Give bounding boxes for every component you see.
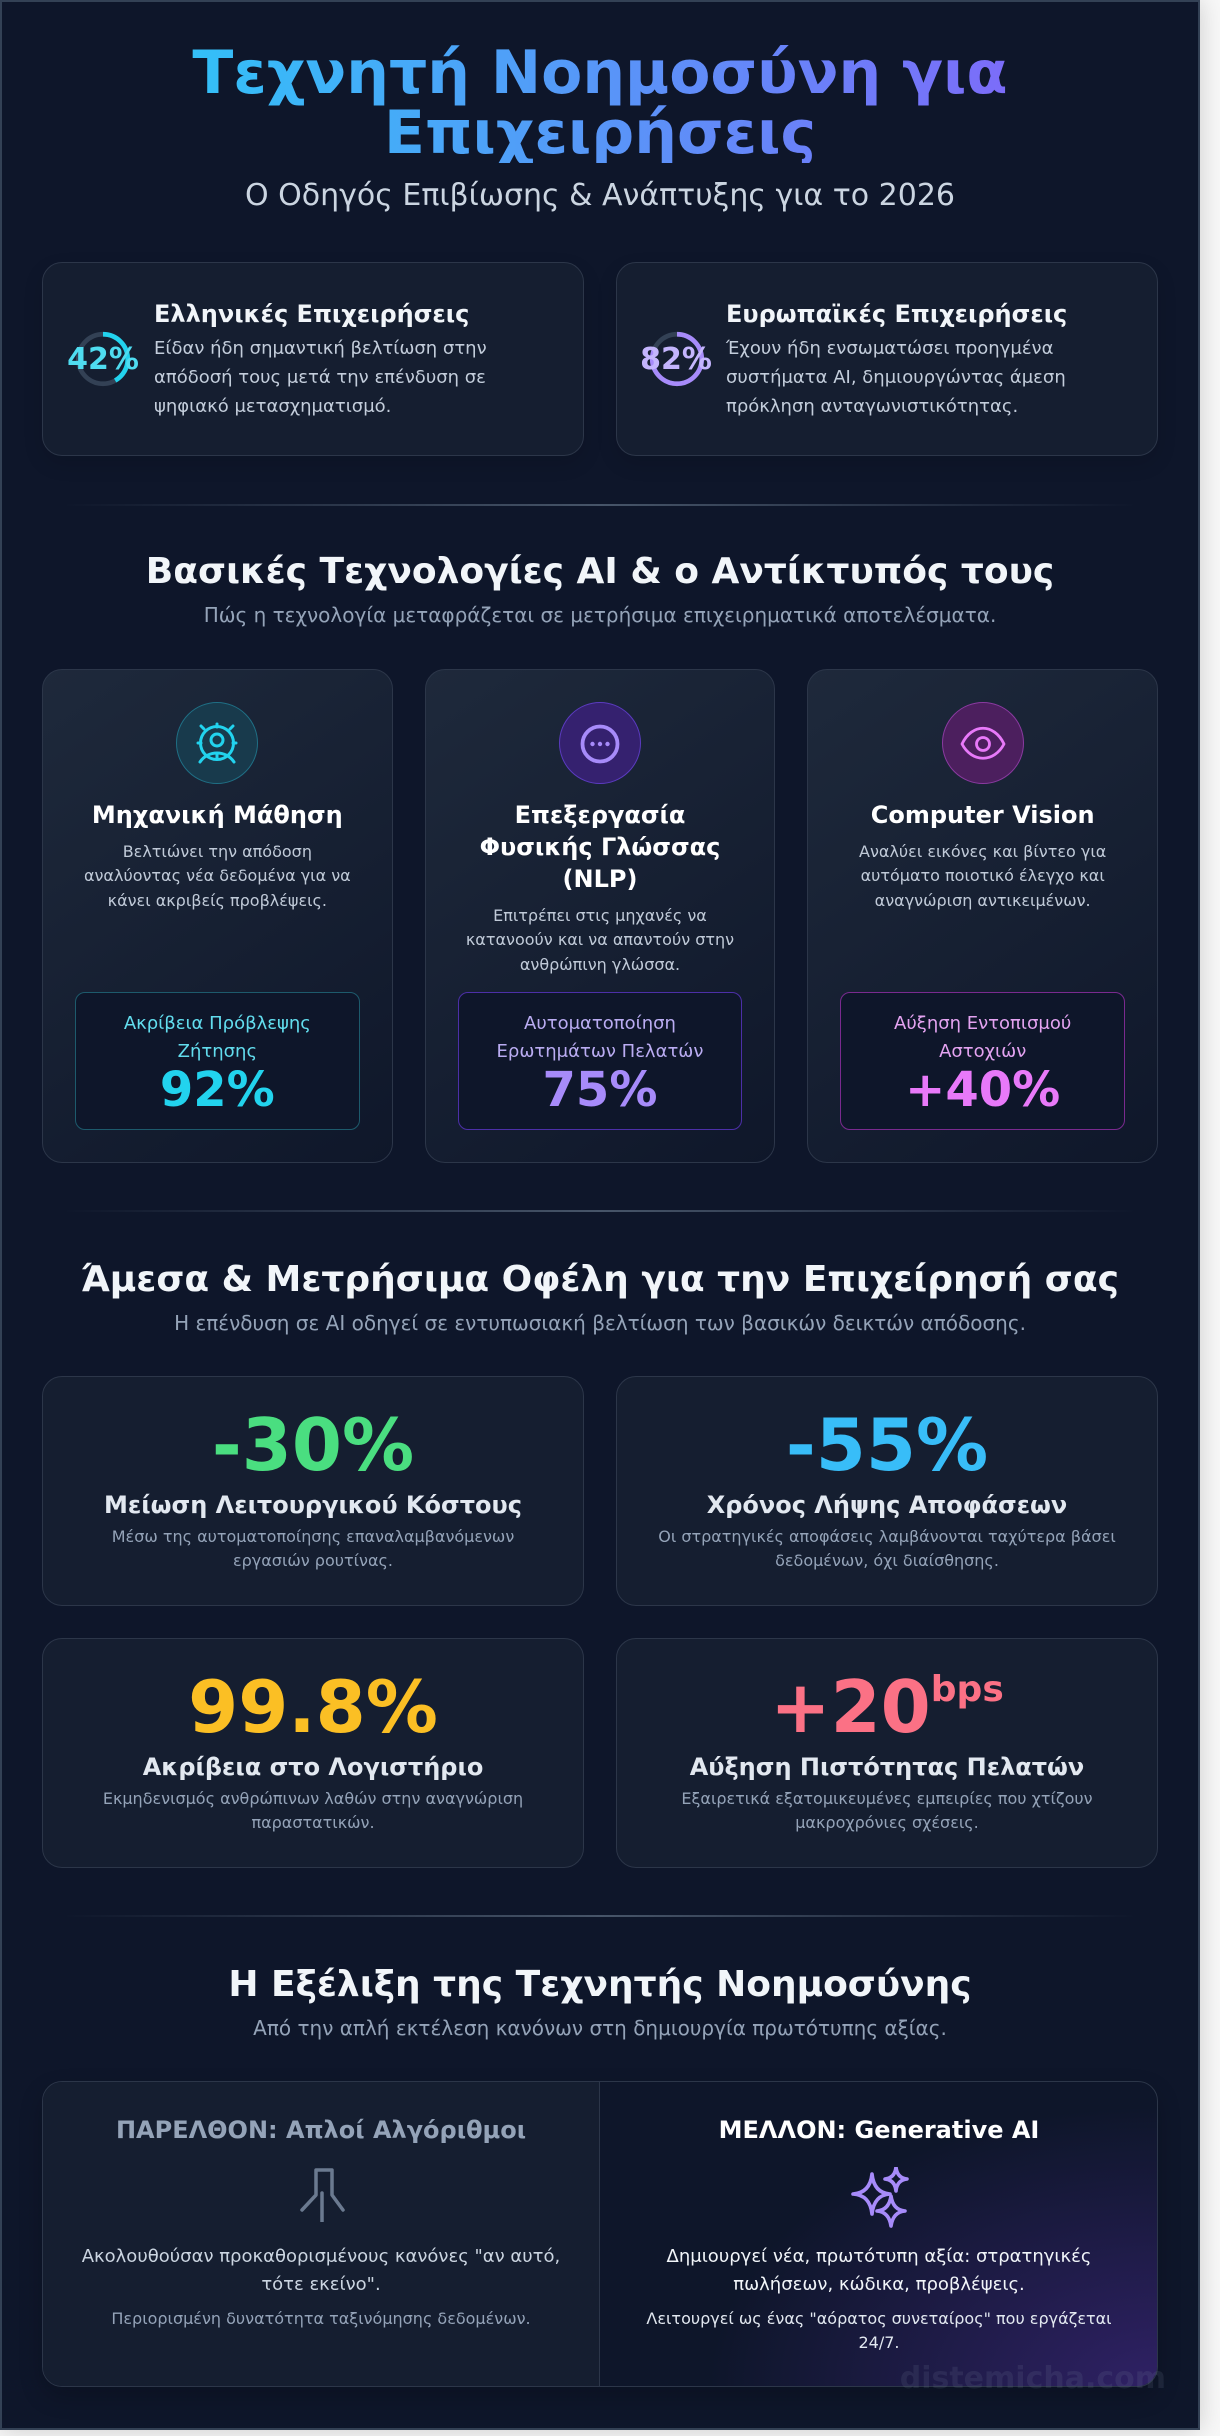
text: European businesses — [726, 300, 1067, 417]
stat description: μακροχρόνιες σχέσεις. — [795, 1813, 979, 1832]
metric label — [497, 1013, 703, 1062]
title: Τεχνητή Νοημοσύνη για — [192, 38, 1008, 108]
metric label — [124, 1013, 311, 1062]
stat description: Εκμηδενισμός ανθρώπινων λαθών στην αναγνώριση — [103, 1789, 523, 1808]
panel: European businesses — [616, 262, 1158, 456]
subtitle: Ο Οδηγός Επιβίωσης & Ανάπτυξης για το 2026 — [245, 178, 955, 213]
stat card: decision time — [616, 1376, 1158, 1606]
stat description — [112, 1527, 514, 1570]
note: future: 24/7. — [858, 2333, 900, 2352]
heading: past: ΠΑΡΕΛΘΟΝ: Απλοί Αλγόριθμοι — [116, 2116, 526, 2144]
metric label — [894, 1013, 1071, 1062]
description — [466, 906, 734, 974]
description: ανθρώπινη γλώσσα. — [520, 955, 680, 974]
text: Greek businesses — [154, 300, 487, 417]
description: κατανοούν και να απαντούν στην — [466, 930, 734, 949]
stat card: cost reduction — [42, 1376, 584, 1606]
metric label: Ερωτημάτων Πελατών — [497, 1041, 703, 1062]
panel: past vs future — [42, 2081, 1158, 2387]
subheading: core technologies: Πώς η τεχνολογία μεταφράζεται σε μετρήσιμα επιχειρηματικά αποτελέσματα. — [204, 603, 996, 627]
text: Greek businesses: Είδαν ήδη σημαντική βελτίωση στην — [154, 338, 487, 359]
text: European businesses: Έχουν ήδη ενσωματώσει προηγμένα — [726, 338, 1053, 359]
text: future: Δημιουργεί νέα, πρωτότυπη αξία: στρατηγικές — [667, 2246, 1091, 2267]
text: past: Ακολουθούσαν προκαθορισμένους κανόνες "αν αυτό, — [82, 2246, 560, 2267]
metric label: Ζήτησης — [178, 1041, 257, 1062]
description: Βελτιώνει την απόδοση — [123, 842, 312, 861]
description: αναλύοντας νέα δεδομένα για να — [84, 866, 351, 885]
metric value: +40% — [905, 1062, 1060, 1118]
panel: NLP — [425, 669, 775, 1163]
text: Greek businesses: ψηφιακό μετασχηματισμό. — [154, 396, 391, 417]
description: αυτόματο ποιοτικό έλεγχο και — [861, 866, 1105, 885]
heading — [480, 801, 720, 893]
description: Επιτρέπει στις μηχανές να — [493, 906, 707, 925]
stat description: Μέσω της αυτοματοποίησης επαναλαμβανόμενων — [112, 1527, 514, 1546]
stat: 82%: 82% — [640, 342, 712, 377]
metric label: Αύξηση Εντοπισμού — [894, 1013, 1071, 1034]
heading: benefits: Άμεσα & Μετρήσιμα Οφέλη για την Επιχείρησή σας — [81, 1259, 1119, 1300]
watermark: distemicha.com — [900, 2361, 1166, 2396]
description: Αναλύει εικόνες και βίντεο για — [859, 842, 1106, 861]
stat card: customer loyalty — [616, 1638, 1158, 1868]
icon: 82% progress ring — [650, 332, 704, 386]
metric label: Ακρίβεια Πρόβλεψης — [124, 1013, 311, 1034]
description — [859, 842, 1106, 910]
heading: core technologies: Βασικές Τεχνολογίες AI & ο Αντίκτυπός τους — [146, 551, 1054, 592]
subheading: evolution: Από την απλή εκτέλεση κανόνων στη δημιουργία πρωτότυπης αξίας. — [253, 2016, 947, 2040]
text: European businesses: συστήματα AI, δημιουργώντας άμεση — [726, 367, 1066, 388]
description — [84, 842, 351, 910]
stat description — [658, 1527, 1116, 1570]
icon: chat bubble — [559, 702, 641, 784]
stat title: Μείωση Λειτουργικού Κόστους — [104, 1491, 522, 1519]
stat description — [681, 1789, 1093, 1832]
stat value: -30% — [212, 1403, 414, 1487]
panel: machine learning — [42, 669, 393, 1163]
stat description: εργασιών ρουτίνας. — [233, 1551, 393, 1570]
icon: sparkles — [851, 2167, 909, 2228]
panel: past — [43, 2082, 600, 2386]
text: past — [82, 2246, 560, 2295]
panel: Greek businesses — [42, 262, 584, 456]
heading: future: ΜΕΛΛΟΝ: Generative AI — [719, 2116, 1039, 2144]
stat description: Εξαιρετικά εξατομικευμένες εμπειρίες που χτίζουν — [681, 1789, 1093, 1808]
description: κάνει ακριβείς προβλέψεις. — [108, 891, 327, 910]
stat value: -55% — [786, 1403, 988, 1487]
heading: Φυσικής Γλώσσας — [480, 833, 720, 861]
text: Greek businesses: απόδοσή τους μετά την επένδυση σε — [154, 367, 486, 388]
icon: eye — [942, 702, 1024, 784]
text: European businesses: Ευρωπαϊκές Επιχειρήσεις — [726, 300, 1067, 328]
subheading: benefits: Η επένδυση σε AI οδηγεί σε εντυπωσιακή βελτίωση των βασικών δεικτών απόδοσης. — [174, 1311, 1026, 1335]
heading: evolution: Η Εξέλιξη της Τεχνητής Νοημοσύνης — [228, 1964, 972, 2005]
icon: 42% progress ring — [76, 332, 130, 386]
icon: machine learning — [176, 702, 258, 784]
metric value: 92% — [160, 1062, 275, 1118]
stat title: Ακρίβεια στο Λογιστήριο — [143, 1753, 483, 1781]
stat value: +20bps — [770, 1665, 1004, 1749]
heading: Μηχανική Μάθηση — [92, 801, 343, 829]
stat description — [103, 1789, 523, 1832]
stat value: 99.8% — [188, 1665, 438, 1749]
description: αναγνώριση αντικειμένων. — [875, 891, 1091, 910]
title — [190, 43, 1010, 163]
heading: Επεξεργασία — [515, 801, 685, 829]
icon: simple algorithm — [300, 2168, 345, 2222]
heading: (NLP) — [563, 865, 637, 893]
stat title: Χρόνος Λήψης Αποφάσεων — [707, 1491, 1067, 1519]
text: European businesses: πρόκληση ανταγωνιστικότητας. — [726, 396, 1018, 417]
note: future — [646, 2309, 1112, 2352]
metric value: 75% — [543, 1062, 657, 1118]
stat description: δεδομένων, όχι διαίσθησης. — [775, 1551, 999, 1570]
metric label: Αστοχιών — [939, 1041, 1026, 1062]
text: future: πωλήσεων, κώδικα, προβλέψεις. — [733, 2274, 1025, 2295]
note: past: Περιορισμένη δυνατότητα ταξινόμησης δεδομένων. — [111, 2309, 531, 2328]
metric label: Αυτοματοποίηση — [524, 1013, 676, 1034]
stat card: accounting accuracy — [42, 1638, 584, 1868]
panel: future — [600, 2082, 1158, 2386]
stat description: Οι στρατηγικές αποφάσεις λαμβάνονται ταχύτερα βάσει — [658, 1527, 1116, 1546]
heading: Computer Vision — [871, 801, 1095, 829]
text: Greek businesses: Ελληνικές Επιχειρήσεις — [154, 300, 469, 328]
note: future: Λειτουργεί ως ένας "αόρατος συνεταίρος" που εργάζεται — [646, 2309, 1112, 2328]
stat: 42%: 42% — [67, 342, 139, 377]
text: future — [666, 2246, 1091, 2295]
metric: 92% — [75, 992, 360, 1130]
panel: computer vision — [807, 669, 1158, 1163]
text: past: τότε εκείνο". — [261, 2274, 381, 2295]
metric: +40% — [840, 992, 1125, 1130]
stat description: παραστατικών. — [251, 1813, 375, 1832]
title: Επιχειρήσεις — [384, 98, 816, 168]
stat title: Αύξηση Πιστότητας Πελατών — [690, 1753, 1084, 1781]
metric: 75% — [458, 992, 742, 1130]
